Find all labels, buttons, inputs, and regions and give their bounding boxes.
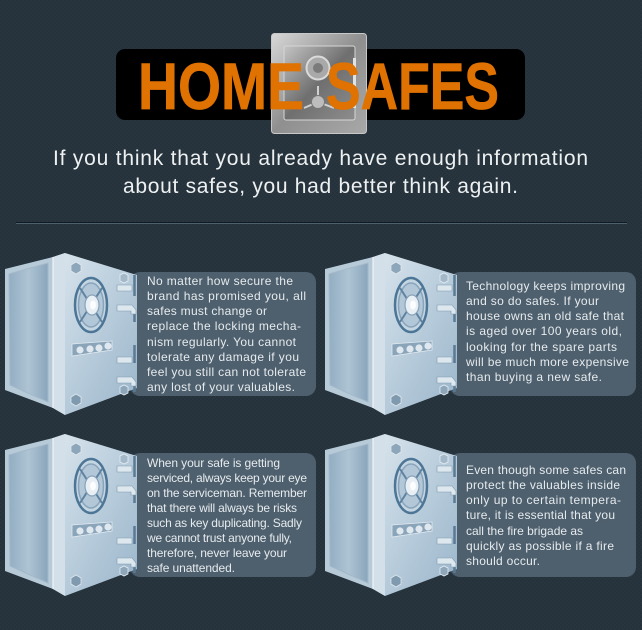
- intro text: If you think that you already have enough information: [53, 147, 588, 170]
- text block: [466, 463, 626, 568]
- text block: protect the valuables inside: [466, 478, 620, 492]
- text block: than buying a new safe.: [466, 370, 602, 384]
- intro text: [53, 147, 588, 198]
- text block: ture, it is essential that you: [466, 508, 615, 522]
- text block: serviced, always keep your eye: [147, 471, 307, 485]
- icon: title safe: [272, 34, 366, 134]
- text block: replace the locking mecha-: [147, 319, 301, 333]
- text block: any lost of your valuables.: [147, 380, 295, 394]
- text block: on the serviceman. Remember: [147, 486, 307, 500]
- text block: should occur.: [466, 554, 540, 568]
- text block: Even though some safes can: [466, 463, 626, 477]
- text block: call the fire brigade as: [466, 524, 583, 538]
- title text: SAFES: [326, 49, 499, 123]
- text block: we cannot trust anyone fully,: [146, 531, 292, 545]
- title banner: [116, 34, 525, 134]
- intro text: about safes, you had better think again.: [123, 175, 518, 198]
- text block: safes must change or: [147, 304, 267, 318]
- text block: [146, 456, 307, 575]
- text box: [450, 453, 636, 577]
- text block: nism regularly. You cannot: [147, 335, 297, 349]
- title text: [138, 49, 499, 123]
- text block: safe unattended.: [147, 561, 235, 575]
- text block: looking for the spare parts: [466, 340, 617, 354]
- text block: feel you still can not tolerate: [147, 365, 306, 379]
- panel: watch the serviceman: [5, 434, 316, 596]
- text block: therefore, never leave your: [147, 546, 287, 560]
- icon: safe: [5, 253, 137, 415]
- text block: is aged over 100 years old,: [466, 324, 622, 338]
- text block: [465, 279, 629, 384]
- panel: fire protection: [325, 434, 636, 596]
- icon: safe: [325, 434, 457, 596]
- panel: change locking mechanism: [5, 253, 316, 415]
- text block: Technology keeps improving: [466, 279, 625, 293]
- text box: [130, 272, 316, 396]
- icon: safe: [5, 434, 137, 596]
- text block: that there will always be risks: [147, 501, 297, 515]
- text block: house owns an old safe that: [466, 309, 625, 323]
- text block: will be much more expensive: [465, 355, 629, 369]
- text block: only up to certain tempera-: [466, 493, 621, 507]
- text box: [450, 272, 636, 396]
- title text: HOME: [138, 49, 304, 123]
- text block: such as key duplicating. Sadly: [147, 516, 302, 530]
- text block: quickly as possible if a fire: [466, 539, 614, 553]
- text block: and so do safes. If your: [466, 294, 599, 308]
- text block: tolerate any damage if you: [147, 350, 299, 364]
- panel: technology keeps improving: [325, 253, 636, 415]
- text box: [130, 453, 316, 577]
- text block: When your safe is getting: [147, 456, 280, 470]
- text block: [147, 274, 306, 394]
- icon: safe: [325, 253, 457, 415]
- text block: brand has promised you, all: [147, 289, 306, 303]
- text block: No matter how secure the: [147, 274, 293, 288]
